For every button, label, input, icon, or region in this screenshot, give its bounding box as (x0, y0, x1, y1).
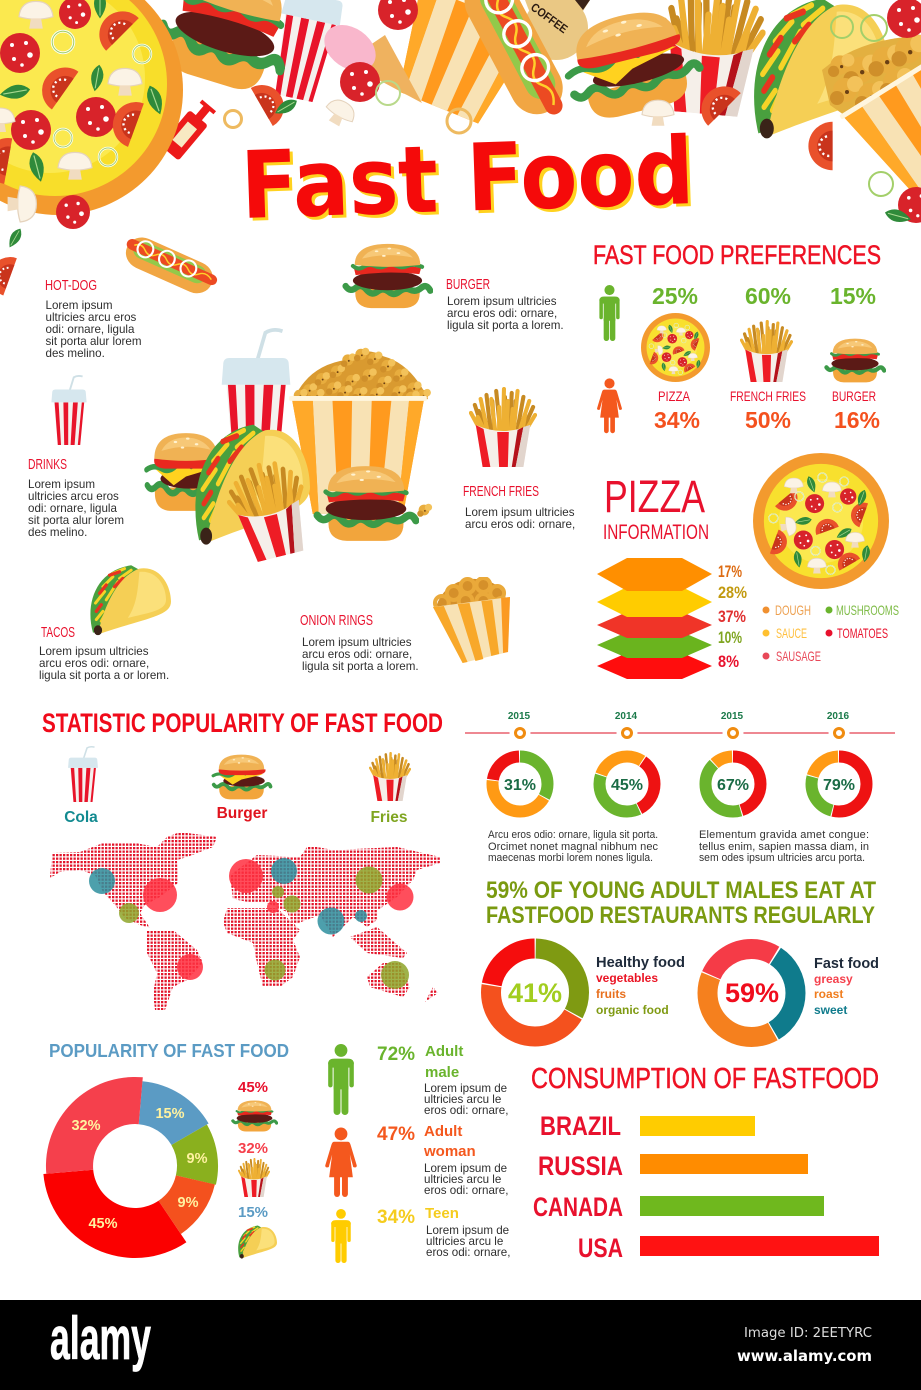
panel: demographics (325, 1043, 510, 1263)
block: french fries text: arcu eros odi: ornare, (465, 518, 575, 531)
block: tacos text: Lorem ipsum ultricies (39, 645, 149, 658)
healthy food list: Healthy food (596, 954, 685, 971)
icon: taco (238, 1226, 277, 1259)
right paragraph: sem odes ipsum ultricies arcu porta. (699, 852, 865, 864)
donut 45%: 45% (611, 777, 643, 794)
website: www.alamy.com (737, 1347, 872, 1365)
adult male stat: Lorem ipsum de (424, 1082, 507, 1095)
block: onion rings text: ONION RINGS (300, 612, 373, 629)
block: hot-dog text: HOT-DOG (45, 277, 97, 294)
title: Fast Food (242, 120, 699, 243)
timeline: 2015 (721, 711, 744, 722)
image id: Image ID: 2EETYRC (744, 1326, 872, 1341)
block: tacos text: TACOS (41, 624, 75, 641)
icon: hot-dog (119, 231, 221, 300)
layer percentages (718, 562, 747, 671)
icon: coffee cup (524, 0, 590, 60)
icon: left burger (146, 433, 226, 511)
exploded donut chart: 32% (71, 1118, 101, 1134)
icon: drink (51, 376, 87, 445)
legend: SAUSAGE (776, 648, 821, 664)
male percentages: 15% (830, 283, 876, 309)
block: drinks text: DRINKS (28, 456, 67, 473)
female percentages: 50% (745, 407, 791, 433)
legend (762, 602, 899, 664)
headline (486, 877, 876, 929)
icon: popcorn top right (822, 35, 921, 125)
timeline: 2016 (827, 711, 850, 722)
adult male stat (377, 1043, 508, 1117)
fast food list: greasy (814, 972, 853, 986)
layer percentages: 28% (718, 583, 747, 602)
icon: burger (213, 755, 270, 799)
left paragraph: Arcu eros odio: ornare, ligula sit porta. (488, 829, 658, 841)
item labels: Cola (64, 809, 98, 826)
icon: male (599, 285, 620, 341)
panel: fast food preferences (593, 240, 884, 433)
icon: taco onion rings (831, 15, 887, 41)
icon: burger (826, 339, 884, 382)
item labels (658, 388, 876, 404)
icon: fries (742, 322, 791, 382)
fast food list: Fast food (814, 955, 879, 972)
icon: cola (68, 747, 98, 802)
donut 67% (706, 756, 760, 812)
item labels: Fries (370, 809, 408, 826)
top food border (0, 0, 921, 295)
adult woman stat (377, 1123, 508, 1197)
panel: young adult males (486, 877, 879, 1037)
icon: adult male (328, 1044, 354, 1115)
item labels: BURGER (832, 388, 876, 404)
icon: popcorn bucket (289, 396, 427, 514)
exploded donut chart (43, 1077, 218, 1258)
teen stat (377, 1205, 510, 1259)
healthy food list: fruits (596, 987, 626, 1001)
exploded donut chart: 9% (178, 1195, 199, 1211)
block: onion rings text: Lorem ipsum ultricies (302, 636, 412, 649)
exploded donut chart: 9% (187, 1151, 208, 1167)
icon: cola cup top (265, 0, 350, 104)
bar labels: CANADA (533, 1192, 623, 1222)
block: drinks text: sit porta alur lorem (28, 514, 124, 527)
legend: SAUCE (776, 625, 807, 641)
icon: french fries (471, 389, 535, 467)
legend: TOMATOES (837, 625, 888, 641)
panel: food items (28, 231, 575, 682)
layer percentages: 8% (718, 652, 739, 671)
block: onion rings text (300, 612, 419, 673)
icon: onion rings (433, 578, 510, 663)
adult woman stat: eros odi: ornare, (424, 1184, 508, 1197)
healthy food list: vegetables (596, 971, 658, 985)
fast food list: roast (814, 987, 843, 1001)
block: hot-dog text (45, 277, 142, 360)
adult woman stat: Lorem ipsum de (424, 1162, 507, 1175)
block: hot-dog text: Lorem ipsum (46, 299, 113, 312)
panel: popularity of fast food (43, 1041, 289, 1259)
icon: adult woman (325, 1127, 357, 1197)
icon: striped snack box top (378, 0, 540, 132)
adult woman stat: Adult (424, 1123, 462, 1140)
donut 45% (600, 756, 654, 812)
male percentages (652, 283, 876, 309)
block: drinks text: ultricies arcu eros (28, 490, 119, 503)
donut 31% (492, 756, 548, 812)
icon: ice cream cone (316, 16, 422, 103)
bar labels: BRAZIL (540, 1111, 621, 1141)
icon: female (597, 378, 622, 433)
block: tacos text (39, 624, 169, 682)
item labels (64, 805, 408, 826)
title: Fast Food (239, 117, 695, 240)
adult male stat: 72% (377, 1044, 415, 1065)
block: onion rings text: ligula sit porta a lorem. (302, 660, 419, 673)
donut 41%: 41% (508, 978, 562, 1008)
layer percentages: 37% (718, 607, 746, 626)
adult male stat: male (425, 1064, 459, 1081)
item labels: PIZZA (658, 388, 691, 404)
bar labels (533, 1111, 623, 1263)
icon: right burger (317, 466, 416, 541)
top left pizza (0, 0, 183, 215)
icon: taco (90, 565, 171, 635)
bar labels: RUSSIA (538, 1151, 623, 1181)
fast food list (814, 955, 879, 1017)
right paragraph (699, 829, 869, 864)
male percentages: 25% (652, 283, 698, 309)
panel: statistic popularity (42, 708, 443, 1010)
teen stat: eros odi: ornare, (426, 1246, 510, 1259)
panel: pizza information (597, 453, 899, 679)
icon: large pizza (753, 453, 889, 589)
block: onion rings text: arcu eros odi: ornare, (302, 648, 412, 661)
right paragraph: tellus enim, sapien massa diam, in (699, 841, 869, 853)
healthy food list: organic food (596, 1003, 669, 1017)
icon: popcorn (292, 348, 431, 404)
icon: coffee cup: COFFEE (528, 0, 570, 36)
layer percentages: 17% (718, 562, 742, 581)
timeline: 2014 (615, 711, 638, 722)
teen stat: Teen (425, 1205, 459, 1222)
donut 79% (812, 756, 866, 812)
bar labels: USA (578, 1233, 623, 1263)
block: drinks text: Lorem ipsum (28, 478, 95, 491)
block: french fries text: Lorem ipsum ultricies (465, 506, 575, 519)
block: tacos text: ligula sit porta a or lorem. (39, 669, 169, 682)
block: burger text: arcu eros odi: ornare, (447, 307, 557, 320)
alamy logo: alamy (50, 1305, 151, 1372)
teen stat: Lorem ipsum de (426, 1224, 509, 1237)
block: burger text: ligula sit porta a lorem. (447, 319, 564, 332)
adult male stat: eros odi: ornare, (424, 1104, 508, 1117)
icon: large cola (222, 330, 290, 473)
side legend: 32% (238, 1140, 268, 1157)
heading (603, 471, 709, 544)
male percentages: 60% (745, 283, 791, 309)
item labels: Burger (217, 805, 267, 822)
side legend: 15% (238, 1204, 268, 1221)
teen stat: ultricies arcu le (426, 1235, 503, 1248)
icon: striped bucket right (839, 41, 921, 217)
icon: fries in front (222, 457, 316, 565)
female percentages (654, 407, 880, 433)
adult woman stat: ultricies arcu le (424, 1173, 501, 1186)
icon: ketchup bottle (160, 98, 218, 161)
central food group (146, 330, 432, 565)
icon: top hotdog (454, 0, 575, 129)
teen stat: 34% (377, 1207, 415, 1228)
donut 41% (491, 948, 579, 1036)
block: hot-dog text: ultricies arcu eros (46, 311, 137, 324)
healthy food list (596, 954, 685, 1017)
icon: top burger with cheese (557, 0, 706, 126)
dotted world map (50, 832, 440, 1010)
scattered garnish (0, 0, 921, 295)
block: hot-dog text: des melino. (46, 347, 105, 360)
heading: POPULARITY OF FAST FOOD (49, 1041, 289, 1061)
heading: INFORMATION (603, 521, 709, 544)
block: drinks text (28, 456, 124, 539)
icon: teen (331, 1209, 351, 1263)
exploded donut chart: 45% (88, 1216, 118, 1232)
icon: fries (239, 1159, 269, 1197)
donut 59% (708, 949, 796, 1037)
female percentages: 34% (654, 407, 700, 433)
block: tacos text: arcu eros odi: ornare, (39, 657, 149, 670)
block: french fries text (463, 483, 575, 531)
footer bar (0, 1300, 921, 1390)
icon: top taco (754, 0, 890, 138)
left paragraph: Orcimet nonet magnal nibhum nec (488, 841, 658, 853)
icon: popcorn kernel (417, 504, 432, 517)
left paragraph: maecenas morbi lorem nones ligula. (488, 852, 653, 864)
panel: consumption of fastfood (531, 1063, 879, 1263)
adult male stat: ultricies arcu le (424, 1093, 501, 1106)
block: burger text (446, 276, 564, 332)
layered hexagon chart (597, 558, 712, 679)
block: hot-dog text: odi: ornare, ligula (46, 323, 135, 336)
icon: fries (370, 753, 410, 801)
heading: PIZZA (604, 471, 705, 522)
map bubbles (89, 858, 414, 989)
block: hot-dog text: sit porta alur lorem (46, 335, 142, 348)
donut 31%: 31% (504, 777, 536, 794)
female percentages: 16% (834, 407, 880, 433)
fast food list: sweet (814, 1003, 847, 1017)
icon: burger (233, 1100, 277, 1132)
block: burger text: BURGER (446, 276, 490, 293)
block: burger text: Lorem ipsum ultricies (447, 295, 557, 308)
block: drinks text: odi: ornare, ligula (28, 502, 117, 515)
block: drinks text: des melino. (28, 526, 87, 539)
exploded donut chart: 15% (155, 1106, 185, 1122)
icon: pizza (641, 313, 710, 382)
timeline: 2015 (508, 711, 531, 722)
bars (640, 1116, 879, 1256)
legend: DOUGH (775, 602, 811, 618)
block: french fries text: FRENCH FRIES (463, 483, 539, 500)
icon: burger (346, 244, 430, 308)
icon: large taco (195, 425, 310, 545)
donut 59%: 59% (725, 978, 779, 1008)
panel: timeline donuts (465, 711, 895, 864)
adult woman stat: woman (423, 1143, 476, 1160)
adult woman stat: 47% (377, 1124, 415, 1145)
donut 67%: 67% (717, 777, 749, 794)
side legend (233, 1079, 277, 1259)
side legend: 45% (238, 1079, 268, 1096)
item labels: FRENCH FRIES (730, 388, 806, 404)
timeline (465, 711, 895, 744)
adult male stat: Adult (425, 1043, 463, 1060)
icon: top fries (656, 0, 766, 118)
right paragraph: Elementum gravida amet congue: (699, 829, 869, 841)
heading: STATISTIC POPULARITY OF FAST FOOD (42, 708, 443, 738)
headline: 59% OF YOUNG ADULT MALES EAT AT (486, 877, 876, 904)
left paragraph (488, 829, 658, 864)
donut 79%: 79% (823, 777, 855, 794)
layer percentages: 10% (718, 628, 742, 647)
icon: top burger (151, 0, 305, 100)
